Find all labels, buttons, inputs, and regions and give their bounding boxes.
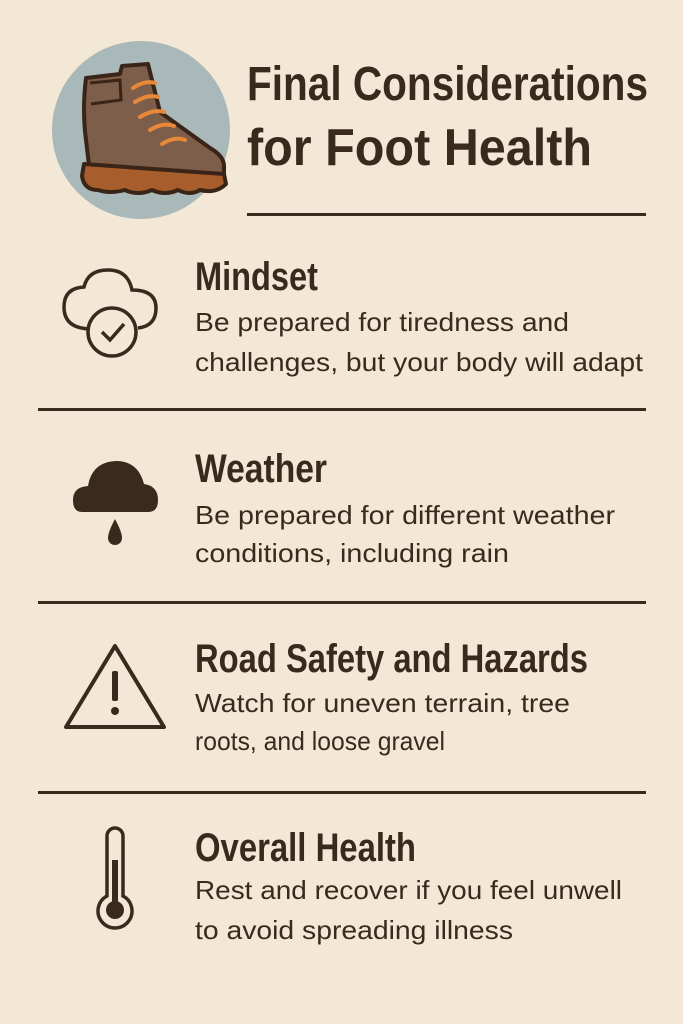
icon: thermometer: [98, 828, 132, 928]
heading and text: weather: [195, 447, 615, 568]
title: [247, 58, 648, 177]
heading and text: weather: Be prepared for different weather: [195, 500, 615, 530]
heading and text: overall health: Rest and recover if you feel unwell: [195, 875, 622, 905]
heading and text: mindset: challenges, but your body will adapt: [195, 347, 644, 377]
heading and text: mindset: Mindset: [195, 255, 318, 299]
heading and text: mindset: [195, 255, 644, 377]
heading and text: road safety: Road Safety and Hazards: [195, 637, 588, 681]
icon: rain cloud: [73, 461, 158, 545]
icon: cloud with check: [64, 270, 156, 356]
heading and text: overall health: [195, 826, 622, 945]
heading and text: overall health: Overall Health: [195, 826, 416, 870]
icon: warning triangle: [66, 646, 164, 727]
heading and text: road safety: roots, and loose gravel: [195, 726, 445, 756]
heading and text: weather: Weather: [195, 447, 327, 491]
title: for Foot Health: [247, 119, 592, 177]
heading and text: mindset: Be prepared for tiredness and: [195, 307, 569, 337]
heading and text: road safety: Watch for uneven terrain, tree: [195, 688, 570, 718]
heading and text: overall health: to avoid spreading illness: [195, 915, 513, 945]
heading and text: weather: conditions, including rain: [195, 538, 509, 568]
heading and text: road safety: [195, 637, 588, 756]
icon: boot in circle: [52, 41, 230, 219]
